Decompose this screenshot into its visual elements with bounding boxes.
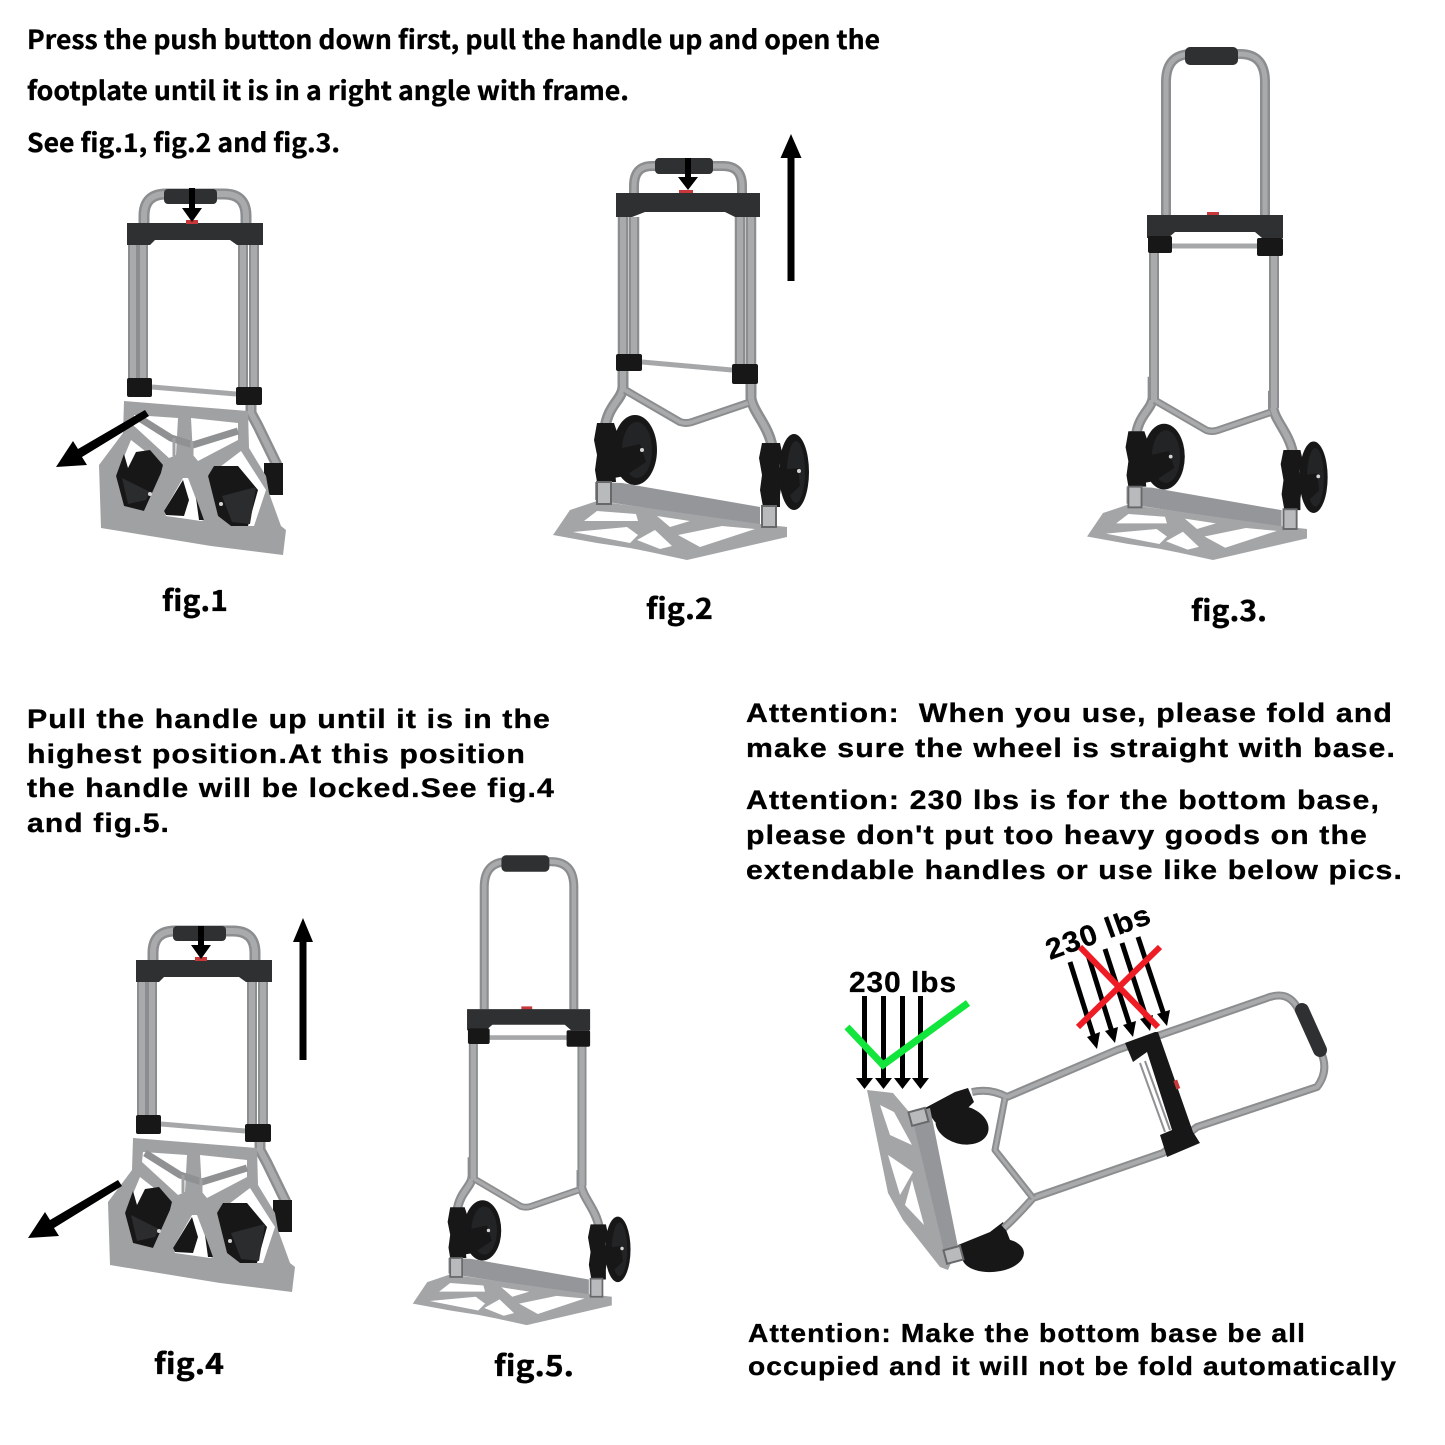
fig.4 caption: fig.4	[154, 1341, 224, 1383]
instructions text: open footplate: Press the push button down first, pull the handle up and open the	[27, 20, 880, 57]
fig.3 caption: fig.3.	[1191, 588, 1267, 630]
arrow: pull handle up (fig.4)	[293, 918, 313, 1060]
instructions text: pull handle: the handle will be locked.See fig.4	[27, 773, 555, 803]
fig.5: open hand truck, handle extended	[413, 855, 631, 1325]
arrow: pull handle up (fig.2)	[780, 134, 802, 281]
arrow: press button	[678, 158, 698, 190]
arrow: press button	[182, 188, 202, 222]
fig.2 caption: fig.2	[646, 586, 713, 628]
fig.2: open hand truck, handle retracted	[553, 158, 809, 560]
instructions text: pull handle: Pull the handle up until it is in the	[27, 704, 551, 734]
arrow: press button	[191, 926, 211, 959]
fig.1 caption: fig.1	[162, 578, 228, 620]
fig.4: folded hand truck with arrows	[28, 926, 295, 1292]
attention notes: Attention: 230 lbs is for the bottom base,	[746, 785, 1380, 815]
instructions text: open footplate	[27, 20, 880, 160]
attention notes: Attention: When you use, please fold and	[746, 698, 1393, 728]
tilted hand truck	[867, 995, 1324, 1275]
icon: red cross	[1078, 947, 1160, 1027]
fig.1: folded hand truck with arrows	[56, 188, 286, 555]
load arrows: correct position	[856, 996, 929, 1089]
attention notes: extendable handles or use like below pics.	[746, 855, 1403, 885]
instructions text: pull handle: highest position.At this position	[27, 739, 526, 769]
label: 230 lbs rotated: 230 lbs	[1041, 899, 1156, 967]
fig.3: open hand truck, handle extended	[1087, 47, 1328, 560]
attention note: bottom base	[748, 1318, 1397, 1381]
attention note: bottom base: Attention: Make the bottom base be all	[748, 1318, 1306, 1348]
attention notes: please don't put too heavy goods on the	[746, 820, 1368, 850]
label: 230 lbs correct: 230 lbs	[849, 967, 957, 999]
instructions text: open footplate: footplate until it is in a right angle with frame.	[27, 71, 629, 108]
instructions text: pull handle	[27, 704, 555, 838]
load arrows: wrong position	[1070, 937, 1170, 1049]
instructions text: open footplate: See fig.1, fig.2 and fig.3.	[27, 123, 340, 160]
fig.5 caption: fig.5.	[494, 1343, 574, 1385]
attention note: bottom base: occupied and it will not be fold automatically	[748, 1351, 1397, 1381]
instructions text: pull handle: and fig.5.	[27, 808, 170, 838]
attention notes: make sure the wheel is straight with base.	[746, 733, 1396, 763]
icon: green check	[847, 1003, 968, 1065]
attention notes	[746, 698, 1403, 885]
